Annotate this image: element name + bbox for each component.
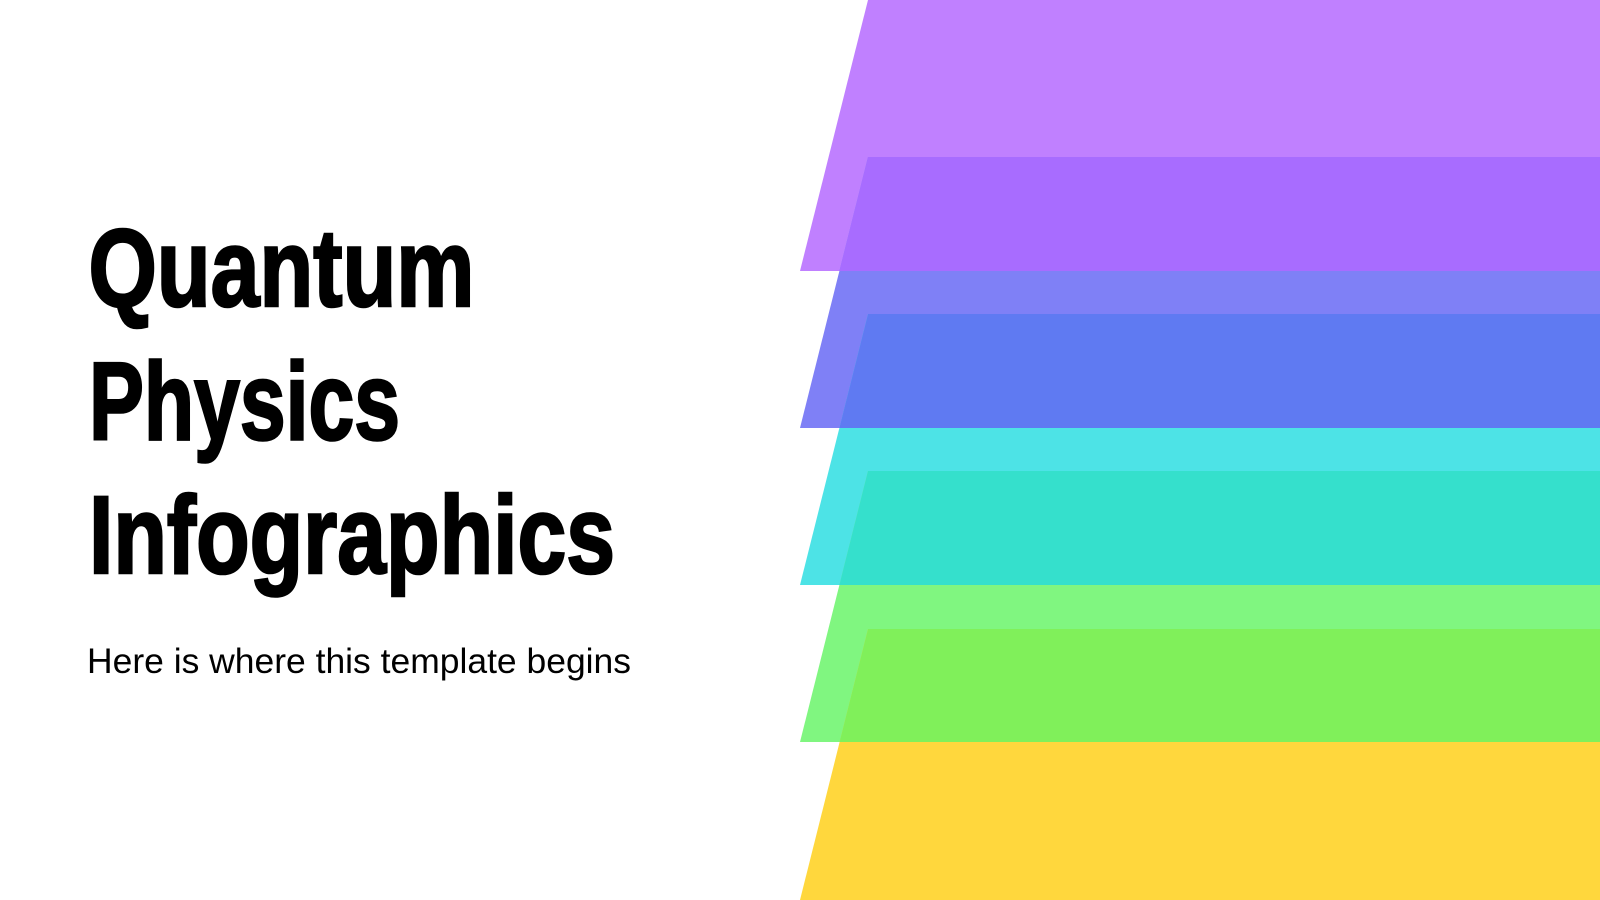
- band: yellow: [800, 629, 1600, 900]
- band: blue: [800, 157, 1600, 428]
- band: purple: [800, 0, 1600, 271]
- title: Infographics: [89, 474, 615, 597]
- title: Quantum: [88, 207, 474, 330]
- title: [88, 207, 615, 597]
- band: green: [800, 471, 1600, 742]
- stacked parallelogram bands: [800, 0, 1600, 900]
- subtitle: Here is where this template begins: [87, 642, 631, 681]
- overlap: purple and blue: [839, 157, 1600, 271]
- overlap: blue and cyan: [839, 314, 1600, 428]
- title: Physics: [89, 340, 400, 464]
- band: cyan: [800, 314, 1600, 585]
- overlap: cyan and green: [839, 471, 1600, 585]
- overlap: green and yellow: [840, 629, 1600, 742]
